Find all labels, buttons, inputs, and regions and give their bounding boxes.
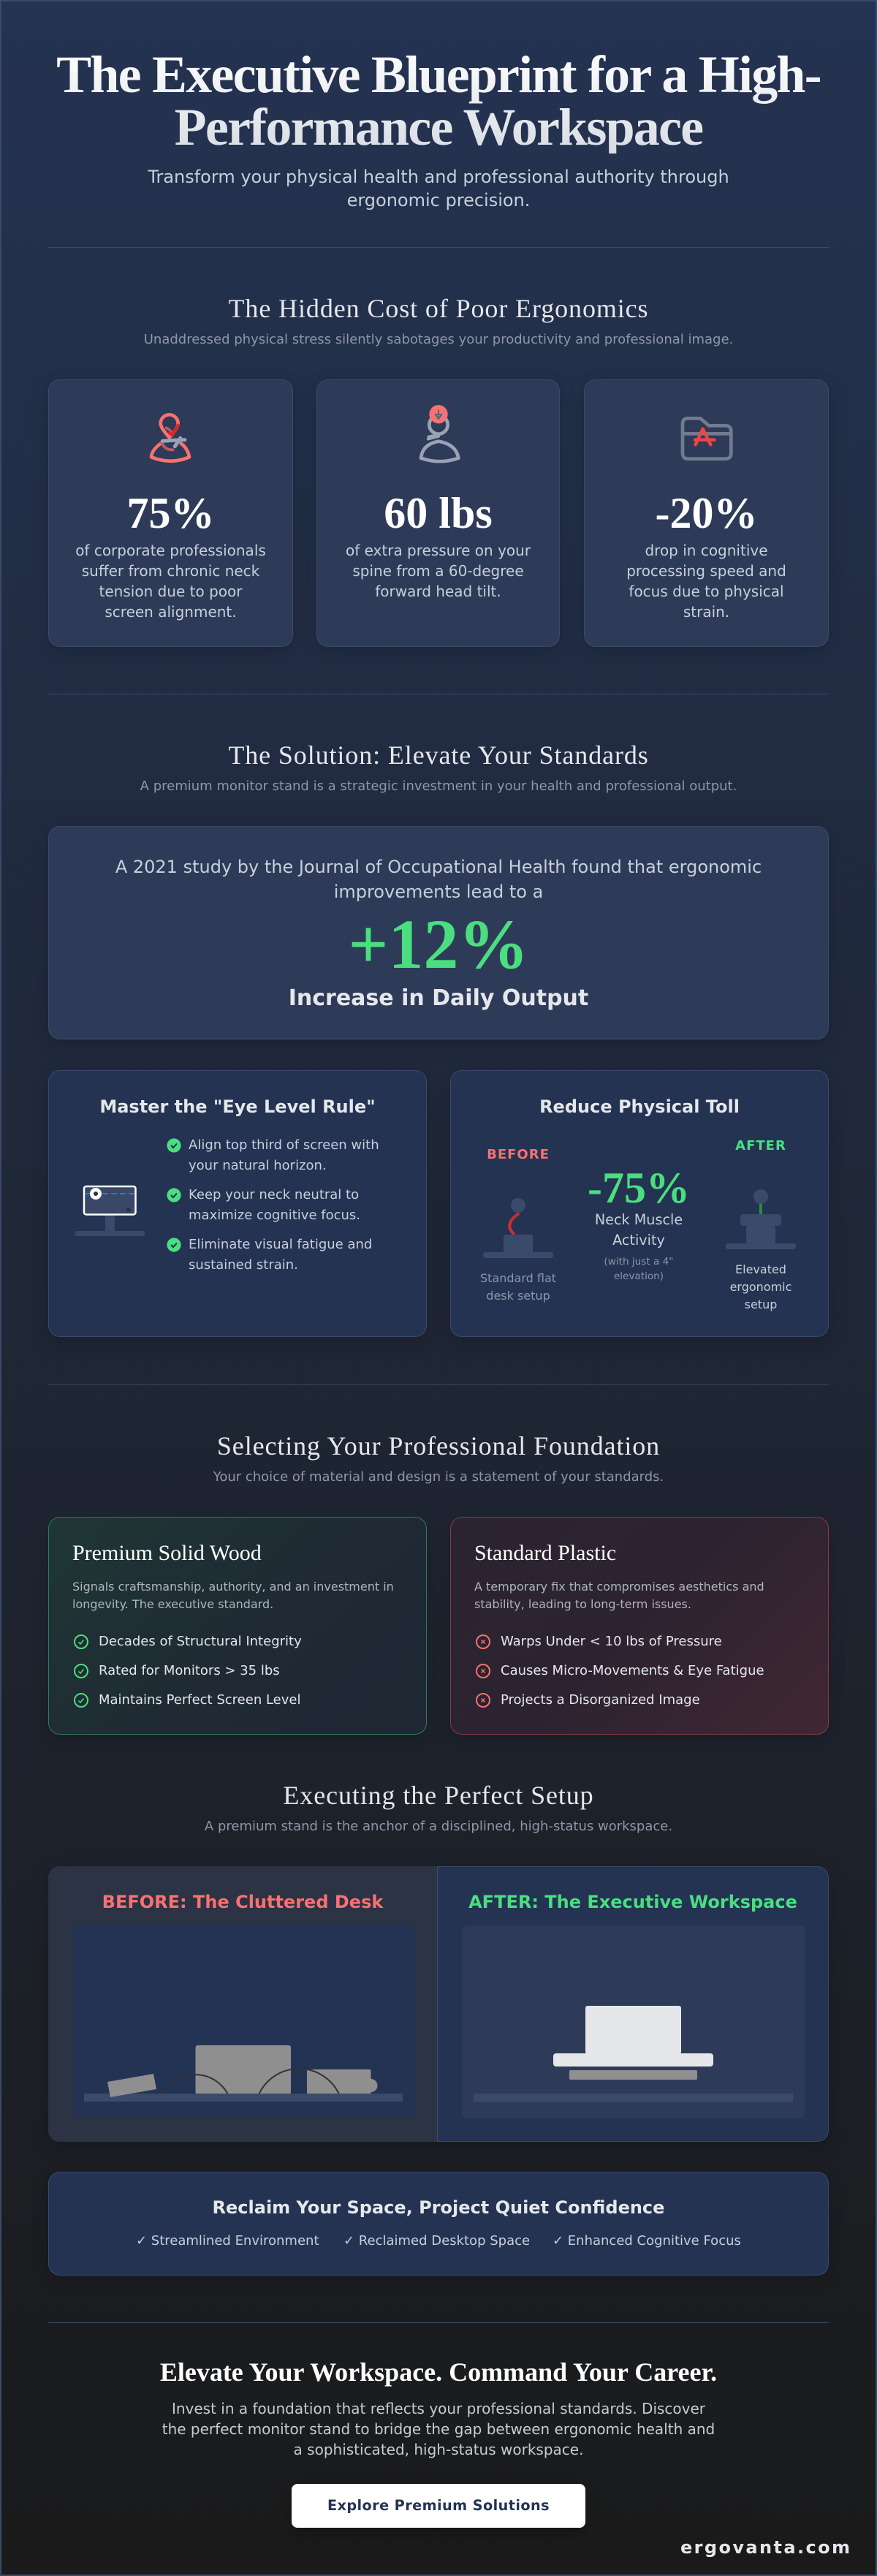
- check item: [189, 1137, 379, 1173]
- stat description: [346, 542, 531, 600]
- check item: Eliminate visual fatigue and: [189, 1237, 372, 1252]
- panel: before and after comparison: [48, 1866, 829, 2142]
- stat description: drop in cognitive: [645, 542, 768, 559]
- study text: improvements lead to a: [334, 882, 543, 902]
- panel: physical toll: [450, 1070, 829, 1337]
- stat description: [626, 542, 786, 621]
- benefit 3: Maintains Perfect Screen Level: [99, 1692, 300, 1708]
- heading: Master the "Eye Level Rule": [99, 1096, 376, 1117]
- panel: standard plastic: [450, 1517, 829, 1735]
- neck muscle stat: -75%: [588, 1164, 690, 1212]
- brand watermark: ergovanta.com: [680, 2537, 851, 2558]
- section heading: setup: Executing the Perfect Setup: [283, 1781, 594, 1810]
- executive desk illustration: [462, 1925, 805, 2118]
- drawback 2: Causes Micro-Movements & Eye Fatigue: [501, 1663, 764, 1678]
- stat description: tension due to poor: [99, 583, 242, 600]
- stat description: processing speed and: [626, 562, 786, 580]
- stat description: of corporate professionals: [75, 542, 266, 559]
- heading: Standard Plastic: [474, 1541, 616, 1565]
- check item: Keep your neck neutral to: [189, 1187, 359, 1202]
- check item: maximize cognitive focus.: [189, 1208, 360, 1223]
- study text: A 2021 study by the Journal of Occupational Health found that ergonomic: [115, 857, 762, 877]
- banner item 2: ✓ Reclaimed Desktop Space: [343, 2233, 530, 2249]
- description: stability, leading to long-term issues.: [474, 1597, 691, 1611]
- stat description: suffer from chronic neck: [82, 562, 259, 580]
- panel: reclaim banner: [48, 2172, 829, 2276]
- subtitle: [148, 167, 729, 211]
- section heading: solution: The Solution: Elevate Your Standards: [228, 740, 649, 770]
- title: The Executive Blueprint for a High-: [56, 45, 821, 104]
- description: [474, 1580, 764, 1611]
- after caption: setup: [745, 1298, 777, 1311]
- banner item 3: ✓ Enhanced Cognitive Focus: [553, 2233, 741, 2249]
- stat caption: Activity: [612, 1232, 665, 1249]
- check icon: [167, 1138, 181, 1153]
- stat value: 60 lbs: [384, 489, 493, 537]
- description: Signals craftsmanship, authority, and an investment in: [72, 1580, 394, 1594]
- icon: folder with mark: [681, 417, 733, 461]
- before caption: Standard flat: [480, 1271, 556, 1285]
- panel: study highlight: [48, 826, 829, 1039]
- after caption: Elevated: [735, 1262, 786, 1276]
- check item: your natural horizon.: [189, 1158, 327, 1173]
- study text: [115, 857, 762, 902]
- closing heading: Elevate Your Workspace. Command Your Career.: [160, 2357, 717, 2387]
- drawback 1: Warps Under < 10 lbs of Pressure: [501, 1634, 722, 1649]
- title: [0, 48, 877, 154]
- stat caption: Increase in Daily Output: [289, 985, 588, 1011]
- checklist: [167, 1137, 379, 1273]
- before heading: BEFORE: The Cluttered Desk: [102, 1892, 383, 1912]
- icon: slouched posture: [483, 1198, 553, 1258]
- heading: Reduce Physical Toll: [539, 1096, 740, 1117]
- section subheading: solution: A premium monitor stand is a strategic investment in your health and professional output.: [140, 779, 737, 794]
- section subheading: hidden cost: Unaddressed physical stress silently sabotages your productivity and professional image.: [144, 332, 733, 347]
- stat caption: Neck Muscle: [595, 1211, 683, 1228]
- big stat: +12%: [349, 905, 528, 983]
- panel: premium wood: [48, 1517, 427, 1735]
- check item: Align top third of screen with: [189, 1137, 379, 1153]
- stat description: focus due to physical: [629, 583, 784, 600]
- stat description: screen alignment.: [105, 603, 237, 621]
- section subheading: setup: A premium stand is the anchor of a disciplined, high-status workspace.: [205, 1819, 672, 1834]
- title: Performance Workspace: [175, 98, 702, 156]
- stat description: [75, 542, 266, 621]
- icon: upright posture: [726, 1189, 796, 1249]
- stat value: -20%: [655, 489, 757, 537]
- icon: monitor at eye level: [75, 1186, 145, 1236]
- after side: [462, 1892, 805, 2118]
- banner item 1: ✓ Streamlined Environment: [136, 2233, 319, 2249]
- closing text: the perfect monitor stand to bridge the gap between ergonomic health and: [162, 2420, 715, 2438]
- call to action button: Explore Premium Solutions: [327, 2497, 550, 2514]
- section heading: hidden cost: The Hidden Cost of Poor Ergonomics: [229, 294, 648, 323]
- icon: spine pressure: [419, 405, 460, 463]
- panel: stat -20%: [584, 379, 829, 647]
- before caption: [480, 1271, 556, 1303]
- section heading: foundation: Selecting Your Professional Foundation: [217, 1431, 660, 1461]
- stat description: forward head tilt.: [375, 583, 501, 600]
- description: [72, 1580, 394, 1611]
- stat value: 75%: [127, 489, 215, 537]
- closing text: Invest in a foundation that reflects your professional standards. Discover: [172, 2400, 705, 2417]
- before side: [48, 1866, 438, 2142]
- closing text: a sophisticated, high-status workspace.: [294, 2441, 583, 2458]
- stat description: spine from a 60-degree: [352, 562, 524, 580]
- benefit 1: Decades of Structural Integrity: [99, 1634, 302, 1649]
- description: A temporary fix that compromises aesthetics and: [474, 1580, 764, 1594]
- banner heading: Reclaim Your Space, Project Quiet Confidence: [213, 2197, 664, 2218]
- after caption: [730, 1262, 791, 1311]
- after caption: ergonomic: [730, 1280, 791, 1294]
- panel: stat 75%: [48, 379, 293, 647]
- section subheading: foundation: Your choice of material and design is a statement of your standards.: [213, 1469, 664, 1485]
- drawback 3: Projects a Disorganized Image: [501, 1692, 700, 1708]
- before label: BEFORE: [487, 1147, 550, 1162]
- benefit 2: Rated for Monitors > 35 lbs: [99, 1663, 280, 1678]
- description: longevity. The executive standard.: [72, 1597, 273, 1611]
- subtitle: ergonomic precision.: [347, 190, 530, 211]
- check item: sustained strain.: [189, 1257, 298, 1273]
- after heading: AFTER: The Executive Workspace: [468, 1892, 797, 1912]
- icon: neck tension: [149, 413, 191, 463]
- subtitle: Transform your physical health and professional authority through: [148, 167, 729, 187]
- stat description: strain.: [683, 603, 729, 621]
- cluttered desk illustration: [73, 1925, 414, 2117]
- stat description: of extra pressure on your: [346, 542, 531, 559]
- panel: stat 60 lbs: [316, 379, 560, 647]
- after label: AFTER: [735, 1138, 786, 1153]
- closing text: [162, 2400, 715, 2458]
- stat note: [604, 1256, 674, 1282]
- before caption: desk setup: [486, 1289, 550, 1303]
- check icon: [167, 1188, 181, 1202]
- check item: [189, 1187, 360, 1223]
- stat note: (with just a 4": [604, 1256, 674, 1268]
- panel: eye level rule: [48, 1070, 427, 1337]
- heading: Premium Solid Wood: [72, 1541, 262, 1565]
- stat caption: [595, 1211, 683, 1249]
- stat note: elevation): [614, 1270, 664, 1282]
- check item: [189, 1237, 372, 1273]
- check icon: [167, 1238, 181, 1252]
- call to action button: [292, 2484, 585, 2528]
